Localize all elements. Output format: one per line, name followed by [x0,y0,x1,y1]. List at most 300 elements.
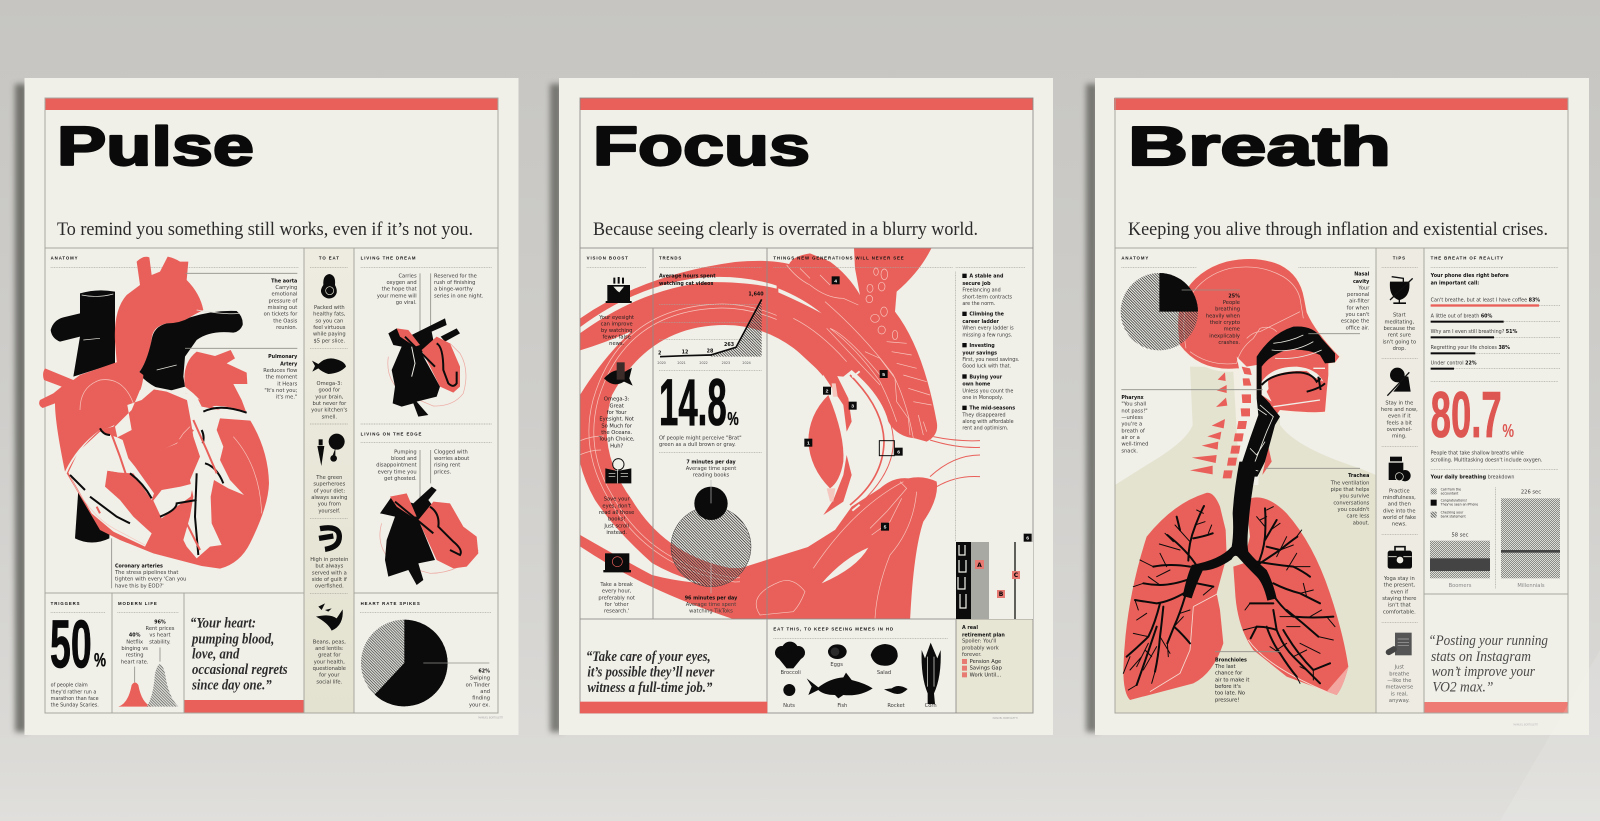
quote [1428,633,1548,696]
legend: Checking your [1441,511,1464,515]
callout: the aorta: reunion. [276,325,298,331]
heading: things new generations will never see: THINGS NEW GENERATIONS WILL NEVER SEE [773,256,905,261]
to eat heading: TO EAT [319,255,340,260]
text: triggers: they'd rather run a [51,689,96,695]
credit: MANUEL BORTOLETTI [478,716,504,719]
label: 62 percent: your ex. [469,702,490,708]
callout: the aorta: pressure of [268,298,298,304]
quote: won’t improve your [1432,664,1535,680]
callout: trachea: you couldn't [1338,507,1369,513]
quote: it’s possible they’ll never [587,664,715,680]
poster: Pulse [15,78,518,735]
callout: coronary arteries: The stress pipelines that [114,570,178,576]
marker 6: 6 [1026,536,1029,542]
icon: clipboard and pill [1385,633,1412,656]
eye number markers: 1 [807,441,810,447]
callout: bronchioles: Bronchioles [1215,657,1247,663]
heading: the breath of reality: THE BREATH OF REALITY [1431,256,1504,261]
text: shrimp: but always [315,564,344,570]
icon: drink crossed [1390,277,1413,304]
legend: bank statement [1441,515,1466,519]
text: tip 2: ming. [1392,434,1407,440]
chart: pie 62 percent [361,620,489,706]
text: tip 3: Practice [1389,488,1410,494]
text: tip 5: Just [1394,665,1404,671]
red quote block [580,702,767,713]
callout: pharynx: well-timed [1121,442,1148,448]
text: vision 4: Take a break [599,582,633,588]
tinted food column [304,248,354,713]
callout: nasal cavity: you can't [1346,312,1369,318]
text: dream left: Carries [398,273,417,279]
label: 96 minutes: Average time spent [686,602,736,608]
illustration: respiratory system [1115,257,1376,713]
text: retirement plan [962,625,1005,678]
text: avocado: $5 per slice. [314,338,345,344]
text: tip 4: even if [1391,589,1408,595]
text: vision 3: eyes, don't [602,503,631,509]
text: vision 2: So Much for [601,423,633,429]
callout: trachea: you survive [1339,494,1369,500]
text: retirement plan: probably work [962,645,999,651]
list: things never seen: Buying your [969,374,1003,380]
text: edge left: Pumping [394,449,417,455]
lungs [1123,462,1348,700]
label: 62 percent: Swiping [470,676,490,682]
chart: millennials stacked bar [1501,490,1560,589]
text: tip 2: even if it [1388,414,1411,420]
text: vision 3: read all those [599,510,634,516]
text: tip 4: the present, [1384,583,1415,589]
food labels: Broccoli [780,670,801,676]
icon: person crossed [1387,368,1411,396]
icon: salad [871,644,898,666]
text: tip 1: because the [1383,326,1415,332]
list: things never seen: your savings [962,350,997,356]
callout: pharynx: Pharynx [1121,395,1145,401]
heading: heart rate spikes: HEART RATE SPIKES [361,601,421,606]
callout: coronary arteries: have this by EOD?' [115,583,164,589]
bar chart: breathing excuses: Regretting your life choices 38% [1431,345,1510,351]
labels: modern life: Rent prices [146,626,175,632]
heading: daily breathing: Your daily breathing breakdown [1430,475,1514,481]
chart: cat videos line: 2020 [657,361,666,365]
text: fish: but never for [312,401,347,407]
label: 62 percent: finding [472,696,490,702]
callout: pulmonary artery: it Hears [277,381,298,387]
retina detail panel: C [1014,572,1019,579]
labels: modern life: 96% [154,619,166,625]
labels: modern life: resting [126,653,144,659]
retina detail panel: A [977,562,982,569]
text: edge left: get ghosted. [384,476,417,482]
label: 7 minutes [686,459,736,479]
callout: nasal cavity [1341,272,1370,331]
list: things never seen: one in Monopoly. [962,395,1003,401]
credit: MANUEL BORTOLETTI [1513,724,1539,727]
callout: nasal cavity: Nasal [1354,272,1370,278]
callout: pulmonary artery: "It's not you; [264,388,298,394]
text: vision 3: Save your [604,497,630,503]
list: things never seen [961,274,1020,432]
food labels: Nuts [783,703,795,709]
icon: beans [316,603,343,631]
poster sheet [24,78,518,735]
text: shrimp: served with a [312,570,347,576]
list: things never seen: own home [962,382,991,388]
text: beans: questionable [313,666,346,672]
quote: love, and [192,647,240,663]
text: beans: for your [319,673,340,679]
list: things never seen: When every ladder is [962,326,1014,332]
callout: 25 percent: their crypto [1210,320,1240,326]
red quote block [1424,702,1568,713]
food labels: Eggs [830,662,843,668]
icon: fish [312,358,346,374]
callout: trachea: pipe that helps [1331,487,1370,493]
chart: cat videos line: 2021 [677,361,686,365]
callout: coronary arteries: Coronary arteries [115,563,163,569]
text: vision 3: Just scroll [603,523,629,529]
callout: trachea: The ventilation [1330,480,1369,486]
text: triggers: marathon than face [51,696,99,702]
text: vision 4: every hour, [602,589,632,595]
text: beans: and lentils: [315,646,344,652]
bar chart: breathing excuses: Why am I even still breathing? 51% [1431,329,1518,335]
tinted retirement cell [956,619,1033,713]
quote: “Take care of your eyes, [586,649,711,665]
text: dream right: Reserved for the [434,273,477,279]
food labels: Rocket [887,703,905,709]
callout: nasal cavity: office air. [1346,325,1370,331]
callout: bronchioles: The last [1214,664,1236,670]
subtitle: Keeping you alive through inflation and existential crises. [1128,219,1548,240]
text: tip 5: metaverse [1386,685,1413,691]
text: vision 3: books! [608,517,625,523]
eye number markers: 4 [834,278,837,284]
list: things never seen: Unless you count the [962,388,1013,394]
text: greens: always saving [311,495,347,501]
poster frame [1115,98,1568,713]
text: avocado: feel virtuous [313,325,346,331]
labels: modern life: heart rate. [121,659,149,665]
text: tip 4: staying there [1382,596,1416,602]
food labels: Fish [837,703,847,709]
small heart: edge [380,487,478,585]
text: vision 1: by watching [601,328,632,334]
callout: pulmonary artery: Artery [280,361,298,367]
stat: 50 percent: % [94,651,106,672]
quote: occasional regrets [192,662,288,678]
heading: living the dream: LIVING THE DREAM [361,255,416,260]
text: greens: yourself. [318,508,341,514]
text: beans: Beans, peas, [313,639,346,645]
poster frame [45,98,498,713]
text: edge right: Clogged with [434,449,468,455]
callout: coronary arteries [114,563,186,589]
text: fish: your kitchen's [311,408,348,414]
chart: cat videos line: watching cat videos [659,281,714,287]
eye number markers: 6 [897,450,900,456]
chart: boomers stacked bar: 58 sec [1452,532,1469,538]
heading: trends: TRENDS [659,256,682,261]
text: tip 3: mindfulness, [1383,495,1416,501]
icon: egg [828,644,847,659]
text: tip 1: Start [1393,313,1406,319]
text: vision 1: fewer false [602,334,631,340]
chart: millennials stacked bar: Millennials [1517,583,1545,589]
callout: 25 percent: People [1223,300,1240,306]
text: retirement plan: Savings Gap [970,666,1002,672]
text: tip 2: overwhel- [1387,427,1412,433]
callout: pulmonary artery: Reduces flow [263,368,297,374]
callout: pharynx: breath of [1121,428,1145,434]
callout: trachea: care less [1347,514,1370,520]
subtitle: Because seeing clearly is overrated in a blurry world. [593,219,978,240]
chart: cat videos line [657,274,764,365]
leader lines [112,273,431,588]
text: dream left: oxygen and [387,280,417,286]
label: 96 minutes: 96 minutes per day [685,595,738,601]
list: things never seen: A stable and [969,274,1004,280]
callout: the aorta: emotional [272,292,297,298]
callout: the aorta: Carrying [275,285,297,291]
heading: triggers: TRIGGERS [51,601,80,606]
list: things never seen: along with affordable [962,419,1014,425]
retina detail panel: B [999,591,1004,598]
chart: cat videos line: 1,640 [748,292,764,298]
text: vision 2: the Oceans. [601,430,632,436]
food labels [780,662,937,709]
list: things never seen: short-term contracts [962,294,1013,300]
chart: cat videos line: 2022 [699,361,708,365]
list: things never seen: The mid-seasons [969,406,1015,412]
list: things never seen: Good luck with that. [962,364,1012,370]
callout: bronchioles: pressure! [1215,697,1239,703]
callout: pharynx: air or a [1121,435,1140,441]
text: vision 4: for 'other [605,602,629,608]
text: edge right: worries about [434,456,469,462]
text: beans: social life. [316,679,343,685]
text: vision 1: news. [609,341,625,347]
text: shrimp: High in protein [310,557,348,563]
poster: Focus [550,78,1053,735]
legend: Congratulations! [1441,498,1467,502]
callout: trachea: conversations [1333,500,1370,506]
text: fish: Omega-3: [317,381,342,387]
callout: pharynx: snack. [1121,448,1138,454]
bar chart: breathing excuses [1431,297,1560,370]
labels: modern life: vs heart [149,633,171,639]
text: tip 4: isn't that [1388,603,1411,609]
quote: since day one.” [191,677,272,693]
callout: the aorta: The aorta [271,278,297,284]
icon: first aid case [1388,547,1412,569]
text: tip 1: meditating, [1384,319,1415,325]
subtitle: To remind you something still works, even if it’s not you. [57,219,473,240]
bar chart: breathing excuses: Can't breathe, but at least I have coffee 83% [1431,297,1540,303]
chart: millennials stacked bar: 226 sec [1521,490,1541,496]
quote: stats on Instagram [1431,649,1531,665]
icon: rocket leaf [884,686,908,694]
text: dream left: your meme will [377,293,417,299]
chart: reading vs scrolling circles [671,480,751,593]
list: things never seen: First, you need savings. [962,357,1020,363]
callout: 25 percent: 25% [1228,293,1240,299]
callout: bronchioles: before it's [1215,684,1241,690]
text: tip 3: dive into the [1383,508,1416,514]
text: brat green: green as a dull brown or gray. [659,442,736,448]
text: phone dies: Your phone dies right before [1430,273,1510,279]
callout: the aorta: missing out [267,305,297,311]
chart: cat videos line: 12 [682,349,688,355]
chart: boomers stacked bar: Boomers [1449,583,1472,589]
text: phone dies: an important call: [1431,281,1479,287]
text: avocado: Packed with [314,305,345,311]
callout: trachea: Trachea [1348,473,1369,479]
legend: Call from the [1441,487,1461,491]
labels: modern life: binging vs [121,646,148,652]
heading: tips: TIPS [1393,256,1406,261]
text: triggers: the Sunday Scaries. [51,703,99,709]
text: avocado: healthy fats, [313,312,346,318]
callout: bronchioles: air to make it [1215,677,1249,683]
callout: 25 percent: inexplicably [1209,333,1240,339]
chart: pie 25 percent [1121,273,1240,350]
stat: 80.7 percent [1431,378,1514,451]
text: shallow breaths: People that take shallow breaths while [1431,451,1524,457]
text: edge left: disappointment [376,463,417,469]
text: tip 5: breathe [1389,671,1409,677]
icon: shrimp [319,528,339,549]
callout: trachea: about. [1353,520,1370,526]
eye number markers: 2 [826,389,829,395]
list: things never seen: are the norm. [962,301,996,307]
red header bar [580,98,1033,110]
text: tip 3: world of fake [1383,515,1416,521]
heading: modern life: MODERN LIFE [118,601,158,606]
label: 96 minutes: watching TikToks [689,609,733,615]
chart: cat videos line: 263 [724,342,734,348]
legend: They've seen an iPhone [1440,503,1478,507]
poster sheet [559,78,1053,735]
text: tip 1: drop. [1393,346,1406,352]
text: dream left: the hope that [382,287,417,293]
callout: nasal cavity: personal [1347,292,1369,298]
stat: 14.8 percent: % [727,408,739,429]
text: retirement plan: Spoiler: You'll [962,639,996,645]
heading: eat this: EAT THIS, TO KEEP SEEING MEMES IN HD [773,627,894,632]
callout: pharynx: not pass!" [1121,408,1148,414]
label: 7 minutes: 7 minutes per day [686,459,736,465]
callout: the aorta: on tickets for [264,312,298,318]
text: edge left: blood and [391,456,417,462]
icon: nuts [783,684,795,696]
list: things never seen: missing a few rungs. [962,332,1013,338]
bar chart: breathing excuses: A little out of breath 60% [1431,313,1493,319]
title Pulse: Pulse [57,115,254,177]
text: greens: superheroes [313,482,346,488]
callout: bronchioles: too late. No [1215,691,1245,697]
quote: “Your heart: [190,615,256,631]
text: retirement plan: Pension Age [970,659,1001,665]
small heart: dream [388,318,466,417]
text: tip 2: Stay in the [1385,400,1413,406]
text: tip 5: —like the [1387,678,1411,684]
text: greens: The green [315,475,342,481]
text: vision 2: Tough Choice, [598,437,635,443]
text: vision 2: Eyesight. Not [599,417,634,423]
heading: living on the edge: LIVING ON THE EDGE [361,431,422,436]
stat: 50 percent: 50 [50,607,92,682]
chart: bell curves [118,647,178,707]
text: dream right: a binge-worthy [434,287,473,293]
chart: cat videos line: 2023 [722,361,730,365]
eye number markers: 5 [884,525,887,531]
callout: pharynx [1121,395,1148,454]
quote [190,615,288,693]
food labels: Salad [877,670,891,676]
text: tip 1: isn't going to [1382,339,1416,345]
poster frame [580,98,1033,713]
callout: pharynx: "You shall [1121,402,1146,408]
text: avocado: so you can [315,318,343,324]
text: tip 2: feels a bit [1387,420,1412,426]
callout: 25 percent: heavily when [1206,313,1240,319]
callout: the aorta [264,278,298,331]
icon: cake [606,277,632,303]
text: dream right: rush of finishing [434,280,475,286]
chart: boomers stacked bar [1430,532,1490,589]
chart: cat videos line: 2 [658,350,661,356]
credit: MANUEL BORTOLETTI [993,717,1018,720]
list: things never seen: They disappeared [961,412,1006,418]
labels: modern life: Netflix [126,639,143,645]
callout: the aorta: the Oasis [273,318,298,324]
labels: modern life: 40% [129,633,141,639]
text: dream right: series in one night. [434,293,484,299]
label: 7 minutes: Average time spent [686,466,736,472]
text: tip 3: and then [1388,502,1411,508]
text: tip 2: here and now, [1381,407,1418,413]
callout: bronchioles: chance for [1215,671,1243,677]
text: triggers: of people claim [51,683,88,689]
chart: cat videos line: 2024 [742,361,751,365]
stat: 14.8 percent: 14.8 [659,365,727,439]
text: tip 3: news. [1392,522,1407,528]
eye number markers [804,276,903,531]
text: retirement plan: A real [962,625,978,631]
list: things never seen: Climbing the [969,312,1005,318]
icon: fish [807,673,873,698]
text: retirement plan: Work Until... [970,672,1002,678]
anatomy heading: ANATOMY [51,255,78,260]
callout: pulmonary artery: the moment [266,375,297,381]
text: shrimp: overfished. [315,584,344,590]
heading: anatomy: ANATOMY [1121,256,1149,261]
bar chart: breathing excuses: Under control 22% [1431,360,1477,366]
food labels: Corn [925,703,937,709]
label: 96 minutes [685,595,738,615]
illustration: heart [39,257,269,569]
list: things never seen: secure job [962,281,991,287]
callout: 25 percent: meme [1224,327,1240,333]
stat: 14.8 percent [659,365,739,439]
text: fish: good for [319,388,341,394]
callout: bronchioles [1214,657,1249,703]
quote [586,649,715,696]
callout: nasal cavity: cavity [1353,279,1370,285]
